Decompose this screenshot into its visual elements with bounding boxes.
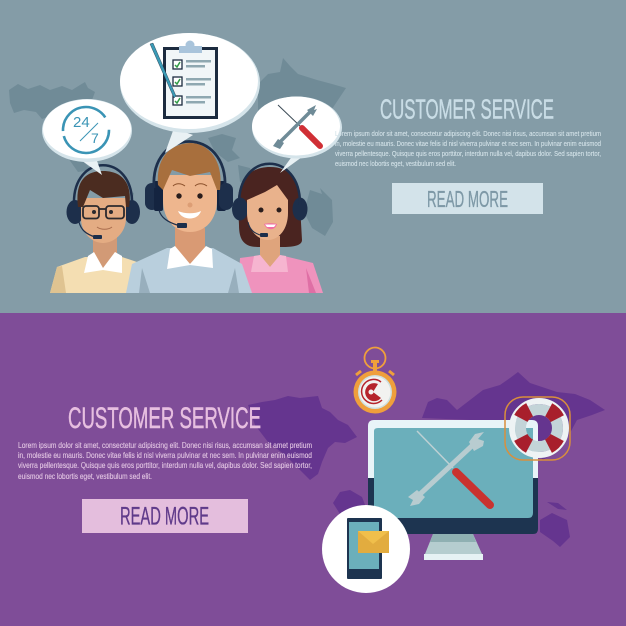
icon: life buoy <box>505 397 570 460</box>
text block: bottom lorem: euismod nec lobortis eget, vestibulum sed elit. <box>18 472 152 481</box>
panel: bottom background <box>0 313 626 626</box>
text block: bottom lorem: Lorem ipsum dolor sit amet, consectetur adipiscing elit. Donec nisi risus, accumsan sit amet pretium <box>18 441 312 450</box>
button: bottom read more <box>82 499 248 533</box>
icon: desktop monitor <box>368 420 538 560</box>
text block: bottom lorem: in, molestie eu mauris. Donec vitae felis id nisl viverra pulvinar et nec sem. In pulvinar enim euismod <box>18 451 312 460</box>
icon: clipboard <box>163 40 218 119</box>
top world map <box>9 58 346 236</box>
button: top read more: READ MORE <box>427 186 508 212</box>
icon: stopwatch <box>354 348 396 414</box>
person: centre male agent <box>126 142 252 293</box>
text block: top lorem <box>335 129 601 168</box>
icon: pen <box>150 43 176 98</box>
button: bottom read more: READ MORE <box>120 502 209 530</box>
button: top read more <box>392 183 543 214</box>
person: left agent with glasses <box>50 165 140 293</box>
heading: bottom: CUSTOMER SERVICE <box>68 402 261 435</box>
bubble: checklist <box>120 33 260 153</box>
text block: top lorem: euismod nec lobortis eget, vestibulum sed elit. <box>335 159 456 168</box>
person: right woman agent <box>232 164 323 293</box>
icon: 24/7 clock <box>63 107 109 153</box>
icon: wrench and screwdriver <box>273 105 320 149</box>
bubble: 24/7 <box>42 99 132 175</box>
panel: top background <box>0 0 626 313</box>
icon: phone with envelope circle <box>322 505 410 593</box>
bubble: tools <box>252 96 342 173</box>
icon: 24/7 clock: 7 <box>91 130 99 146</box>
text block: bottom lorem: viverra pellentesque. Quisque quis eros porttitor, interdum nulla vel, dapibus dolor. Sed sapien tortor, <box>18 461 312 470</box>
text block: bottom lorem <box>18 441 312 481</box>
bottom world map <box>248 372 605 547</box>
icon: 24/7 clock: 24 <box>73 114 90 131</box>
icon: wrench and screwdriver on screen <box>408 431 490 506</box>
